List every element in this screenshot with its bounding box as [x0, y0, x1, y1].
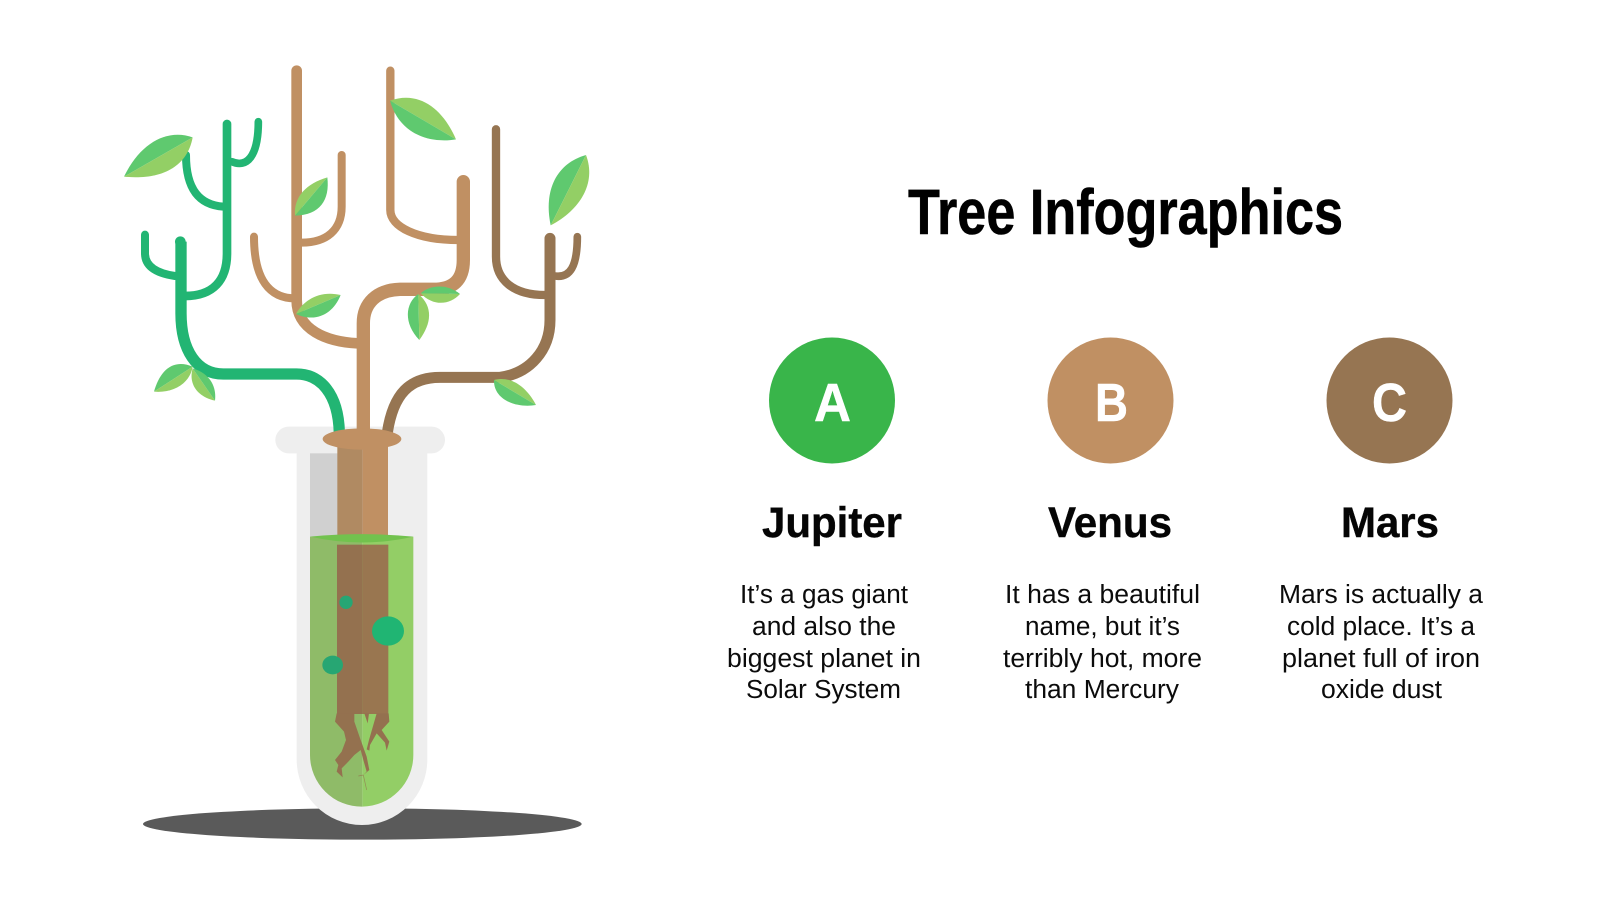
leaf: centre pair right: [421, 287, 460, 303]
leaf: top right: [549, 155, 589, 225]
circle A: A: [814, 373, 851, 433]
heading: Mars: Mars: [1341, 499, 1439, 547]
text: Venus description: It has a beautiful: [1005, 581, 1200, 609]
leaf: centre pair down: [408, 294, 429, 340]
text: Jupiter description: biggest planet in: [727, 645, 921, 673]
text: Jupiter description: Solar System: [746, 676, 901, 704]
text: Venus description: than Mercury: [1025, 676, 1179, 704]
circle C: C: [1372, 373, 1407, 433]
leaf: lower stem: [296, 294, 341, 318]
circle B: [1048, 338, 1174, 464]
leaves: [124, 98, 589, 406]
text: Jupiter description: [727, 581, 921, 704]
text: Mars description: planet full of iron: [1282, 645, 1480, 673]
text: Jupiter description: and also the: [752, 613, 896, 641]
leaf: top centre: [390, 98, 456, 140]
tan branches: [254, 71, 463, 437]
text: Venus description: name, but it’s: [1025, 613, 1180, 641]
title: Tree Infographics: [908, 176, 1343, 248]
text: Mars description: cold place. It’s a: [1287, 613, 1476, 641]
ground shadow: [143, 808, 582, 840]
panel: Jupiter: [727, 338, 921, 704]
text: Mars description: oxide dust: [1321, 676, 1442, 704]
text: Jupiter description: It’s a gas giant: [740, 581, 908, 609]
leaf: lower right: [494, 379, 536, 406]
text: Venus description: terribly hot, more: [1003, 645, 1202, 673]
illustration: tree in test tube: [124, 71, 589, 840]
text: Mars description: [1279, 581, 1484, 704]
liquid: [310, 534, 413, 807]
leaf: centre stem: [295, 177, 328, 216]
circle C: [1326, 338, 1452, 464]
text: Venus description: [1003, 581, 1202, 704]
heading: Jupiter: Jupiter: [762, 499, 902, 547]
test tube with liquid: [143, 427, 582, 840]
leaf: lower left one: [154, 364, 193, 392]
trunk collar: [323, 428, 401, 450]
panel: Mars: [1279, 338, 1484, 704]
green branches: [145, 122, 339, 433]
trunk above liquid: [337, 440, 388, 537]
leaf: top left: [124, 135, 193, 177]
leaf: lower left two: [192, 368, 215, 401]
empty glass shade: [310, 453, 362, 537]
circle A: [769, 338, 895, 464]
roots: [335, 713, 389, 790]
submerged trunk: [337, 545, 388, 714]
text: Mars description: Mars is actually a: [1279, 581, 1484, 609]
circle B: B: [1095, 373, 1128, 433]
brown branches: [387, 129, 577, 433]
panel: Venus: [1003, 338, 1202, 704]
heading: Venus: Venus: [1048, 499, 1172, 547]
glass tube: [275, 427, 445, 825]
tree branches: [124, 71, 589, 450]
bubbles: [322, 596, 404, 674]
